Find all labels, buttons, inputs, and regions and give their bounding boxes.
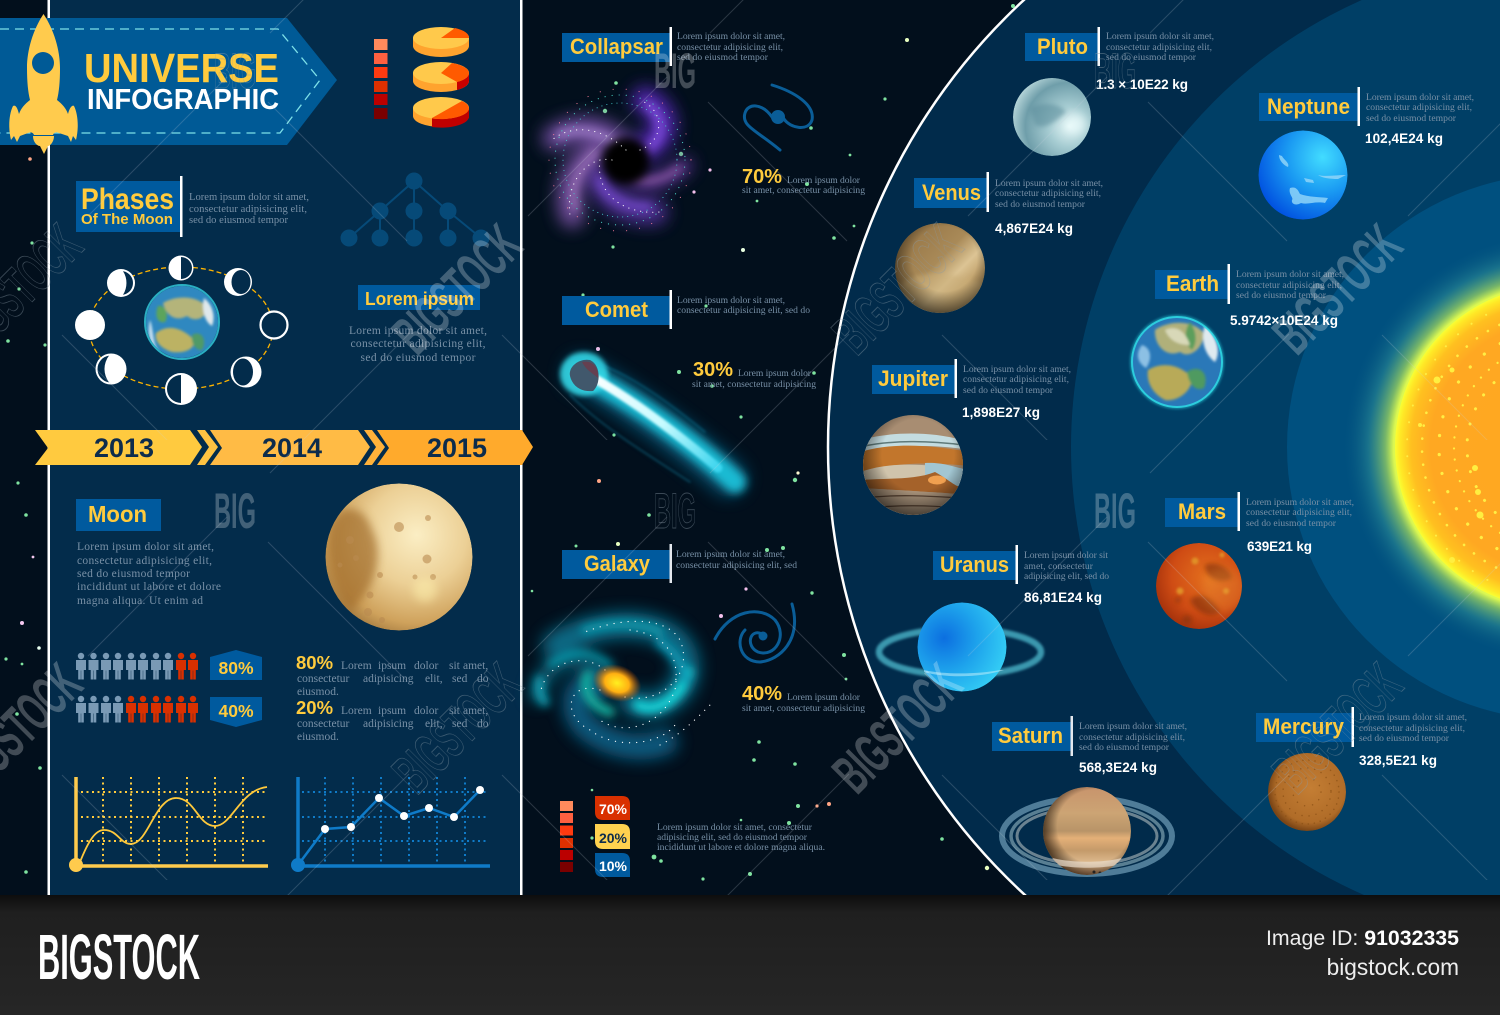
- title text: [84, 45, 279, 116]
- Venus globe: [895, 223, 988, 315]
- text: 80% note: adipisicing: [363, 673, 414, 685]
- Saturn description: Lorem ipsum dolor sit amet,: [1079, 721, 1187, 732]
- text: 80% note: sit: [449, 660, 461, 672]
- sun: [1354, 253, 1500, 640]
- text: comet description: Lorem ipsum dolor sit amet,: [677, 295, 785, 306]
- Neptune description: Lorem ipsum dolor sit amet,: [1366, 92, 1474, 103]
- icon: galaxy symbol: [715, 604, 794, 662]
- text: bottom description: [657, 822, 825, 853]
- text: collapsar description: [677, 31, 785, 63]
- Mars description: Lorem ipsum dolor sit amet,: [1246, 497, 1354, 508]
- watermark: BIGSTOCK stamps: BIGSTOCK: [821, 213, 974, 366]
- text: bottom description: incididunt ut labore et dolore magna aliqua.: [657, 842, 825, 853]
- moon phase markers: [75, 256, 288, 405]
- text: 20% note: do: [477, 718, 489, 730]
- text: phases description: consectetur adipisicing elit,: [189, 204, 307, 215]
- Earth label: [1155, 264, 1230, 304]
- text: comet description: consectetur adipisicing elit, sed do: [677, 305, 810, 316]
- Uranus label: Uranus: [940, 552, 1009, 577]
- planet: Jupiter: [860, 359, 1071, 520]
- text: lorem ipsum description: [349, 325, 487, 364]
- Mercury description: consectetur adipisicing elit,: [1359, 723, 1465, 734]
- text: 80% note: 80%: [296, 652, 333, 673]
- text: 20% note: amet,: [463, 705, 488, 717]
- Pluto label: Pluto: [1037, 34, 1088, 59]
- Saturn mass: 568,3E24 kg: [1079, 760, 1157, 775]
- stat: 30%: 30%: [693, 359, 733, 381]
- solar system discs: [826, 0, 1500, 895]
- Jupiter description: [963, 364, 1071, 396]
- stat: 40%: [742, 683, 865, 714]
- footer site: bigstock.com: [1327, 954, 1459, 980]
- Mercury label: Mercury: [1263, 714, 1345, 739]
- text: bottom description: Lorem ipsum dolor sit amet, consectetur: [657, 822, 813, 833]
- planet: Uranus: [879, 545, 1109, 692]
- heading: Phases of the Moon: [76, 176, 182, 237]
- Jupiter description: sed do eiusmod tempor: [963, 385, 1054, 396]
- heading: Collapsar: Collapsar: [570, 34, 663, 59]
- text: 80% note: do: [477, 673, 489, 685]
- heading: Moon: Moon: [88, 501, 147, 527]
- Neptune globe: [1258, 130, 1348, 220]
- text: 20% note: adipisicing: [363, 718, 414, 730]
- Mars label: Mars: [1178, 499, 1226, 524]
- planet: Pluto: [1013, 27, 1214, 156]
- Mars description: [1246, 497, 1354, 529]
- planet: Mercury: [1256, 707, 1467, 831]
- left panel: [48, 0, 522, 895]
- illustration: collapsar black hole: [549, 89, 691, 231]
- Mercury description: sed do eiusmod tempor: [1359, 733, 1450, 744]
- pictogram: 80%: [76, 650, 262, 680]
- text: 80% note: elit,: [425, 673, 443, 685]
- Mars description: sed do eiusmod tempor: [1246, 518, 1337, 529]
- moon phases diagram: [75, 256, 288, 405]
- Neptune description: consectetur adipisicing elit,: [1366, 102, 1472, 113]
- planet: Neptune: [1258, 87, 1474, 220]
- Jupiter mass: 1,898E27 kg: [962, 405, 1040, 420]
- stat: 30%: sit amet, consectetur adipisicing: [692, 379, 816, 390]
- heading: Galaxy: Galaxy: [584, 551, 651, 576]
- watermark: BIGSTOCK stamps: BIGSTOCK: [381, 652, 534, 805]
- heading: Comet: Comet: [585, 297, 649, 322]
- text: moon description: Lorem ipsum dolor sit amet,: [77, 541, 214, 553]
- Neptune description: sed do eiusmod tempor: [1366, 113, 1457, 124]
- Jupiter label: Jupiter: [878, 366, 948, 391]
- Earth description: consectetur adipisicing elit,: [1236, 280, 1342, 291]
- text: 20% note: sit: [449, 705, 461, 717]
- text: 20% note: dolor: [414, 705, 438, 717]
- text: phases description: [189, 192, 309, 226]
- Earth label: Earth: [1166, 271, 1219, 296]
- Uranus ring and globe: [879, 602, 1041, 692]
- Mercury mass: 328,5E21 kg: [1359, 753, 1437, 768]
- timeline years: 2013: [94, 433, 154, 463]
- planet: Saturn: [992, 716, 1187, 875]
- text: 80% note: Lorem: [341, 660, 372, 672]
- text: 80% note: sed: [452, 673, 468, 685]
- stat: 70%: [742, 166, 865, 196]
- Mercury label: [1256, 707, 1354, 747]
- planet: Mars: [1156, 492, 1354, 629]
- Venus mass: 4,867E24 kg: [995, 221, 1073, 236]
- Mars mass: 639E21 kg: [1247, 539, 1312, 554]
- planet: Venus: [895, 172, 1103, 315]
- Pluto mass: 1.3 × 10E22 kg: [1096, 77, 1188, 92]
- heading: Phases of the Moon: Of The Moon: [81, 211, 173, 228]
- badges: 70 / 20 / 10 percent: 20%: [599, 830, 628, 846]
- illustration: spiral galaxy: [537, 621, 710, 747]
- Uranus label: [933, 545, 1018, 584]
- Jupiter globe: [863, 415, 963, 515]
- stat: 40%: 40%: [742, 683, 782, 705]
- text: phases description: Lorem ipsum dolor sit amet,: [189, 192, 309, 203]
- Uranus description: amet, consectetur: [1024, 561, 1094, 572]
- Saturn label: Saturn: [998, 723, 1063, 748]
- badges: 70 / 20 / 10 percent: 10%: [599, 858, 628, 874]
- text: collapsar description: consectetur adipisicing elit,: [677, 42, 783, 53]
- Uranus description: adipisicing elit, sed do: [1024, 571, 1109, 582]
- watermark: BIGSTOCK stamps: [0, 213, 1414, 805]
- pictogram: 40%: 40%: [218, 701, 254, 721]
- Venus label: Venus: [922, 180, 981, 205]
- Pluto description: sed do eiusmod tempor: [1106, 52, 1197, 63]
- Mars description: consectetur adipisicing elit,: [1246, 507, 1352, 518]
- text: 20% note: sed: [452, 718, 468, 730]
- footer bar: BIGSTOCK: [38, 921, 200, 993]
- text: collapsar description: Lorem ipsum dolor sit amet,: [677, 31, 785, 42]
- Earth description: sed do eiusmod tempor: [1236, 290, 1327, 301]
- title text: INFOGRAPHIC: [87, 84, 279, 116]
- Mars globe: [1156, 543, 1246, 629]
- colour scale: bottom legend: [560, 801, 573, 872]
- icon: tree network: [342, 174, 488, 246]
- Neptune mass: 102,4E24 kg: [1365, 131, 1443, 146]
- timeline ribbon: [35, 430, 533, 465]
- Jupiter label: [872, 359, 957, 398]
- heading: Galaxy: [562, 544, 672, 583]
- text: 80% note: ipsum: [378, 660, 406, 672]
- stat: 70%: 70%: [742, 166, 782, 188]
- title banner: [0, 14, 337, 154]
- Venus description: consectetur adipisicing elit,: [995, 188, 1101, 199]
- text: bottom description: adipisicing elit, sed do eiusmod tempor: [657, 832, 808, 843]
- text: 80% note: dolor: [414, 660, 438, 672]
- watermark: BIGSTOCK stamps: BIGSTOCK: [381, 213, 534, 366]
- Earth globe: [1130, 315, 1224, 409]
- text: BIG: [1094, 483, 1136, 539]
- title text: UNIVERSE: [84, 45, 279, 91]
- text: 80% note: amet,: [463, 660, 488, 672]
- Jupiter description: consectetur adipisicing elit,: [963, 374, 1069, 385]
- text: 80% note: eiusmod.: [297, 686, 339, 698]
- watermark: BIG stamps: BIG: [214, 43, 256, 99]
- Mars label: [1165, 492, 1240, 531]
- footer bar: [0, 895, 1500, 1015]
- text: 20% note: ipsum: [378, 705, 406, 717]
- watermark: BIGSTOCK stamps: BIGSTOCK: [821, 652, 974, 805]
- Pluto description: [1106, 31, 1214, 63]
- Uranus description: Lorem ipsum dolor sit: [1024, 550, 1108, 561]
- Jupiter description: Lorem ipsum dolor sit amet,: [963, 364, 1071, 375]
- footer image id: Image ID: 91032335: [1266, 926, 1459, 950]
- stat: 70%: sit amet, consectetur adipisicing: [742, 185, 865, 196]
- text: 20% note: 20%: [296, 697, 333, 718]
- text: BIG: [1094, 43, 1136, 99]
- text: lorem ipsum description: sed do eiusmod tempor: [360, 352, 476, 364]
- text: 20% note: eiusmod.: [297, 731, 339, 743]
- 3D pie charts: [413, 27, 469, 128]
- heading: Phases of the Moon: Phases: [81, 183, 174, 216]
- text: moon description: [77, 541, 221, 607]
- text: collapsar description: sed do eiusmod tempor: [677, 52, 769, 63]
- timeline years: 2014: [262, 433, 322, 463]
- pictogram: 40%: [76, 696, 262, 727]
- watermark: BIG stamps: BIG: [654, 483, 696, 539]
- Venus description: Lorem ipsum dolor sit amet,: [995, 178, 1103, 189]
- icon: rocket: [9, 14, 78, 154]
- Venus description: sed do eiusmod tempor: [995, 199, 1086, 210]
- text: galaxy description: consectetur adipisicing elit, sed: [676, 560, 797, 571]
- planet: Earth: [1130, 264, 1344, 409]
- Neptune label: Neptune: [1267, 94, 1350, 119]
- Mercury globe: [1268, 753, 1346, 831]
- heading: Collapsar: [562, 27, 672, 66]
- badges: 70 / 20 / 10 percent: 70%: [599, 801, 628, 817]
- Earth description: Lorem ipsum dolor sit amet,: [1236, 269, 1344, 280]
- text: 20% note: consectetur: [297, 718, 350, 730]
- heading: Comet: [562, 290, 672, 329]
- timeline years: 2015: [427, 433, 487, 463]
- heading: Moon: [76, 499, 161, 531]
- Venus label: [914, 172, 989, 212]
- Neptune description: [1366, 92, 1474, 124]
- icon: collapsar symbol: [744, 85, 812, 150]
- Pluto globe: [1013, 78, 1091, 156]
- Saturn description: consectetur adipisicing elit,: [1079, 732, 1185, 743]
- watermark: BIG stamps: [214, 43, 1136, 539]
- Earth mass: 5.9742×10E24 kg: [1230, 313, 1338, 328]
- Uranus mass: 86,81E24 kg: [1024, 590, 1102, 605]
- Neptune label: [1259, 87, 1360, 126]
- Saturn rings and globe: [1002, 787, 1172, 875]
- text: phases description: sed do eiusmod tempor: [189, 215, 288, 226]
- text: 20% note: [296, 697, 489, 743]
- watermark: BIG stamps: BIG: [654, 43, 696, 99]
- illustration: comet: [560, 352, 735, 482]
- badges: 70 / 20 / 10 percent: [595, 796, 630, 877]
- Uranus description: [1024, 550, 1109, 582]
- heading: Lorem ipsum: Lorem ipsum: [365, 288, 474, 309]
- Saturn description: [1079, 721, 1187, 753]
- stat: 40%: sit amet, consectetur adipisicing: [742, 703, 865, 714]
- stat: 30%: Lorem ipsum dolor: [738, 368, 812, 379]
- text: 20% note: elit,: [425, 718, 443, 730]
- Saturn description: sed do eiusmod tempor: [1079, 742, 1170, 753]
- text: moon description: sed do eiusmod tempor: [77, 568, 190, 580]
- text: 80% note: consectetur: [297, 673, 350, 685]
- timeline years: [94, 433, 487, 463]
- text: comet description: [677, 295, 810, 316]
- Venus description: [995, 178, 1103, 210]
- chart: blue line: [291, 777, 490, 872]
- colour scale: [374, 39, 388, 119]
- pictogram: 80%: 80%: [218, 658, 254, 678]
- text: moon description: consectetur adipisicing elit,: [77, 555, 212, 567]
- text: lorem ipsum description: consectetur adipisicing elit,: [350, 338, 486, 350]
- text: 80% note: [296, 652, 489, 698]
- Pluto description: consectetur adipisicing elit,: [1106, 42, 1212, 53]
- stat: 30%: [692, 359, 816, 390]
- Earth description: [1236, 269, 1344, 301]
- Saturn label: [992, 716, 1073, 756]
- starfield: [4, 4, 1015, 881]
- text: moon description: magna aliqua. Ut enim ad: [77, 595, 203, 607]
- text: 20% note: Lorem: [341, 705, 372, 717]
- text: galaxy description: Lorem ipsum dolor sit amet,: [676, 549, 785, 560]
- text: lorem ipsum description: Lorem ipsum dolor sit amet,: [349, 325, 487, 337]
- text: moon description: incididunt ut labore et dolore: [77, 581, 221, 593]
- watermark: BIG stamps: BIG: [214, 483, 256, 539]
- stat: 70%: Lorem ipsum dolor: [787, 175, 861, 186]
- Mercury description: [1359, 712, 1467, 744]
- Pluto description: Lorem ipsum dolor sit amet,: [1106, 31, 1214, 42]
- Pluto label: [1025, 27, 1100, 66]
- Mercury description: Lorem ipsum dolor sit amet,: [1359, 712, 1467, 723]
- planet: Moon: [326, 484, 472, 630]
- stat: 40%: Lorem ipsum dolor: [787, 692, 861, 703]
- text: galaxy description: [676, 549, 797, 571]
- icon: earth small: [144, 284, 220, 360]
- chart: yellow curve: [69, 777, 268, 872]
